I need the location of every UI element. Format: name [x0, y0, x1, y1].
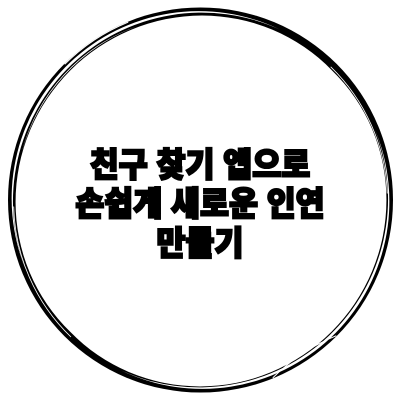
title: 친구 찾기 앱으로 — [90, 146, 310, 184]
title: 만들기 — [157, 224, 243, 262]
title: 손쉽게 새로운 인연 — [75, 185, 325, 223]
title — [75, 146, 325, 262]
